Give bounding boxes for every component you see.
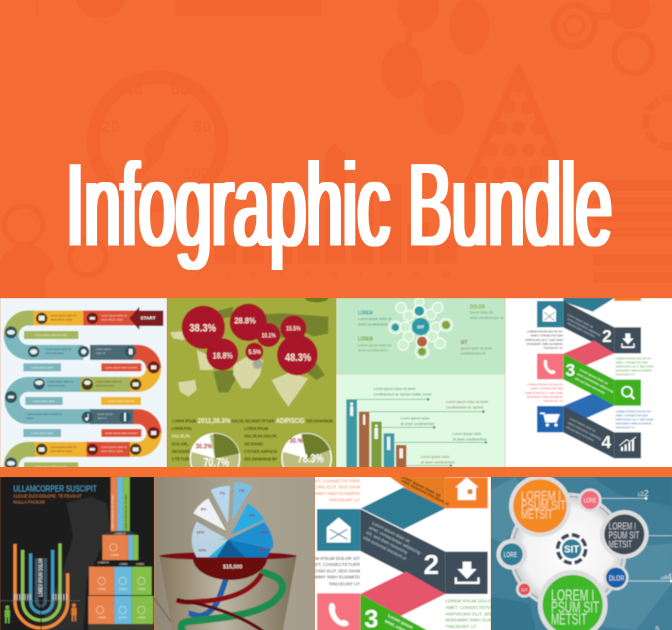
stacked tower: LOREM IP [98, 562, 109, 564]
panel: dark stacked chart [0, 477, 154, 630]
world map [170, 307, 328, 407]
captions: AMET, CONSECTETUER [308, 478, 361, 483]
small number labels: 444 [661, 571, 672, 581]
captions [315, 478, 360, 586]
timeline labels: turpis [27, 416, 34, 420]
pie chart: 10% [196, 529, 205, 534]
panel: ribbon steps: ADIPISCING ELIT, SED DIAM [615, 417, 654, 421]
pie: 30 / 78.3: 30.% [289, 436, 303, 445]
step captions [525, 329, 564, 403]
banner background pattern: 100 [183, 165, 210, 183]
network diagram [389, 297, 452, 358]
circle: orange: PSUM SIT [521, 497, 566, 512]
panel: ribbon steps close-up: AMET, CONSECTETUER [445, 605, 498, 610]
panel: ribbon steps: LOREM IPSUM DOLOR SIT [615, 409, 651, 413]
caption row: 2011.38.3% DOLOR, [244, 434, 277, 439]
captions: ADIPISCING ELIT, SED DIAM [300, 569, 360, 574]
circle: dark: PSUM SIT [609, 531, 639, 542]
circle: red sit: SIT [521, 587, 528, 592]
bar labels: Lorem ipsum dolor sit amet [373, 387, 415, 391]
pie: 30.3 / 70.7: 30.3% [195, 441, 212, 450]
stacked tower: LOREM IPSUM DOLOR SIT AMET [125, 494, 128, 531]
network labels: Ipsum dolor sit [470, 311, 493, 315]
panel: ribbon steps close-up: NONUMMY NIBH EUISMOD [445, 617, 504, 622]
bar labels: sit amet condimentum [453, 437, 487, 441]
center SIT badge [558, 535, 586, 563]
pie chart: 10% [260, 529, 269, 534]
concentric U chart [0, 543, 80, 630]
bar labels: condimentum at, laoreet [446, 405, 483, 409]
panel: ribbon steps: TINCIDUNT UT [615, 372, 635, 376]
red percentage bubbles: 18.8% [213, 350, 233, 360]
pie chart: 7% [219, 491, 225, 496]
banner background pattern: 4 [278, 270, 283, 279]
pie chart [192, 482, 273, 580]
caption row: LOREM IPSUM [172, 418, 196, 423]
U chart label: LOREM IPSUM DOLOR [38, 558, 44, 597]
stacked tower [88, 477, 153, 630]
ribbon text: Lorem ipsum dolor sit [372, 520, 411, 544]
banner background pattern: 8 [387, 270, 392, 279]
caption row: LOREM IPSU [172, 426, 192, 431]
step captions: AMET, CONSECTETUER [530, 334, 563, 338]
stacked tower: LOREM [98, 589, 106, 591]
start arrow: START [140, 316, 156, 321]
banner background pattern: 0 [106, 165, 115, 183]
circle: teal lore: LORE [504, 552, 517, 559]
banner background pattern: 80 [193, 118, 211, 136]
panel: ribbon steps: NONUMMY NIBH EUISMOD [615, 368, 652, 372]
caption row: CTETUER [172, 457, 193, 462]
banner background pattern: 3 [251, 270, 256, 279]
bar labels: Lorem ipsum dolor sit amet [446, 400, 488, 404]
stacked tower: LOREM [98, 618, 106, 620]
step captions: TINCIDUNT UT [543, 399, 563, 403]
stacked tower: LOREM [136, 564, 144, 566]
caption row: 2011,38.3% [198, 416, 231, 425]
caption row: SICENSE [244, 441, 263, 446]
panel: ribbon steps: AMET, CONSECTETUER [615, 413, 648, 417]
network diagram: SIT [417, 324, 424, 329]
circle: dark [600, 510, 649, 559]
network labels: amet condimentum [358, 349, 388, 353]
captions: LOREM IPSUM DOLOR SIT [303, 556, 360, 561]
timeline labels: amet nisl ut, turpis [101, 449, 124, 453]
circle: green [538, 570, 608, 630]
small number labels [637, 488, 672, 630]
timeline labels: amet nisl turpis [48, 383, 66, 387]
ribbon text: nibh euismod tincidunt ut [401, 478, 450, 507]
ribbon text: Lorem ipsum dolor sit [399, 473, 442, 498]
bar labels [373, 387, 488, 464]
panel: network and bars [336, 297, 505, 469]
step captions: NONUMMY NIBH EUISMOD [527, 342, 563, 346]
bar labels: condimentum at, laoreet mattis, lorem [373, 392, 432, 396]
bar labels: sit amet condimentum [421, 460, 455, 464]
network labels: LOREM [358, 337, 373, 343]
panel: ribbon steps close-up: ADIPISCING ELIT, SED DIAM [445, 611, 506, 616]
timeline labels: Lorem ipsum dolor sit [46, 347, 71, 351]
timeline labels: amet nisl ut, turpis [51, 449, 73, 453]
stacked tower: LOREM [137, 618, 146, 620]
timeline labels: dolor sit [96, 351, 106, 355]
red percentage bubbles: 28.8% [234, 316, 256, 326]
network labels: DOLOR [470, 304, 485, 310]
captions: TINCIDUNT UT [329, 581, 360, 586]
panel: ribbon steps: TINCIDUNT UT [615, 425, 635, 429]
caption row: ADIPISCIG [276, 416, 305, 425]
ribbon text: elit sed diam nonummy [566, 425, 595, 443]
step captions: ADIPISCING ELIT, SED DIAM [525, 338, 564, 342]
banner background pattern: 45.5% [270, 339, 317, 366]
stacked tower: LOREM [119, 618, 127, 620]
network labels: Lorem ipsum dolor sit [358, 317, 391, 321]
panel: ribbon steps close-up: TINCIDUNT UT [445, 624, 477, 629]
panel: ribbon steps close-up [315, 477, 491, 630]
network labels: amet condimentum at [470, 316, 504, 320]
bar labels: sit amet condimentum [400, 422, 435, 426]
caption row: SED DIANONUM [306, 418, 333, 423]
start arrow [129, 307, 163, 330]
step captions: ADIPISCING ELIT, SED DIAM [525, 391, 564, 395]
pie chart: 7% [239, 488, 245, 493]
chart heading: ULLAMCORPER SUSCIPIT [13, 484, 97, 493]
timeline labels: amet nisl ut, turpis [51, 318, 73, 322]
banner background pattern: 6 [333, 270, 338, 279]
pie: 30 / 78.3: 78.3% [298, 451, 324, 465]
bar labels: Lorem ipsum dolor [453, 432, 482, 436]
red percentage bubbles [182, 304, 318, 375]
network labels: amet condimentum [358, 322, 388, 326]
captions: AMET, CONSECTETUER [308, 562, 361, 567]
small number labels: 222 [637, 488, 649, 498]
caption row: SED DIANONUM MY [244, 457, 277, 462]
pie chart: 8% [249, 512, 256, 517]
step captions: LOREM IPSUM DOLOR SIT [527, 329, 563, 333]
timeline labels: Lorem ipsum dolor sit [48, 379, 73, 383]
pie chart: 8% [201, 507, 207, 512]
ribbon text: Lorem ipsum dolor sit [569, 416, 596, 433]
panel: ribbon steps: NONUMMY NIBH EUISMOD [615, 421, 652, 425]
timeline labels: amet nisl turpis [46, 351, 64, 355]
ribbon text: elit, sed diam nonummy [366, 530, 409, 555]
circle: orange: METSIT [521, 507, 553, 522]
circle: red sit [516, 581, 533, 598]
red percentage bubbles: 15.5% [286, 325, 301, 332]
timeline labels: Lorem ipsum dolor sit amet ut [27, 412, 62, 416]
ribbon text: amet consectetur adipiscing [567, 317, 602, 337]
bar labels: Lorem ipsum dolor [400, 417, 430, 421]
ribbon text: elit sed diam nonummy [567, 321, 596, 339]
step numbers: 2 [424, 549, 439, 580]
timeline labels: Lorem ipsum dolor sit [51, 445, 76, 449]
red percentage bubbles: 38.3% [189, 323, 216, 335]
step captions: TINCIDUNT UT [543, 346, 563, 350]
timeline labels [23, 314, 141, 470]
timeline icons [5, 313, 160, 469]
ribbons [177, 572, 283, 630]
red percentage bubbles: 10.1% [262, 333, 276, 340]
circle: green: PSUM SIT [551, 600, 600, 617]
step captions: LOREM IPSUM DOLOR SIT [527, 382, 563, 386]
banner background pattern [0, 0, 672, 394]
panel: serpentine timeline [0, 298, 167, 484]
timeline labels: Lorem ipsum dolor sit amet [35, 333, 67, 337]
stacked tower: LOREM [137, 589, 146, 591]
timeline labels: dolor sit [97, 416, 107, 420]
circle: pink lore: LORE [584, 497, 596, 504]
circle: orange: LOREM I [521, 488, 561, 503]
step captions: NONUMMY NIBH EUISMOD [527, 395, 563, 399]
caption row [172, 416, 333, 462]
banner background pattern: 5.1% [536, 339, 574, 366]
ribbon text: Lorem ipsum dolor sit [579, 368, 609, 385]
timeline labels: Lorem ipsum dolor sit [96, 379, 122, 383]
pie: 30.3 / 70.7 [188, 432, 242, 467]
captions: NONUMMY NIBH EUISMOD [302, 491, 361, 496]
caption row: 2011.38.3% [172, 434, 190, 439]
timeline labels: Lorem ipsum [96, 347, 112, 351]
circle: blue dlor: DLOR [609, 575, 624, 582]
banner: orange header [0, 0, 672, 394]
panel: ribbon steps: ADIPISCING ELIT, SED DIAM [615, 364, 654, 368]
step captions: AMET, CONSECTETUER [530, 387, 563, 391]
step numbers: 3 [566, 360, 576, 380]
caption row: DOLOR, SICONSECTETUER [232, 418, 275, 423]
timeline labels: amet nisl turpis [96, 383, 115, 387]
pie: 30.3 / 70.7: 70.7% [203, 455, 230, 469]
caption row: DOLOR, [172, 441, 189, 446]
pie chart: $15,000 [223, 564, 242, 570]
red percentage bubbles: 5.5% [248, 350, 262, 356]
step numbers [566, 326, 612, 452]
ribbon text: amet consectetur adipiscing [576, 372, 614, 394]
caption row: CTETUER ADIPISCIG [244, 449, 278, 454]
ribbon text [566, 312, 614, 443]
icon squares [317, 477, 488, 630]
circle: teal lore [496, 539, 527, 570]
circle: blue dlor [603, 565, 629, 590]
figures [5, 603, 77, 623]
timeline labels: Lorem ipsum dolor sit [101, 314, 127, 318]
red percentage bubbles: 48.3% [285, 352, 311, 364]
pie chart: 10% [198, 547, 207, 552]
banner background pattern: 9 [413, 270, 418, 279]
chart heading: AUGUE DUIS DOLORE. TE FEUGAIT [13, 493, 82, 498]
network labels: Ipsum dolor sit amet [461, 346, 492, 350]
timeline labels: Lorem ipsum dolor [31, 431, 53, 435]
timeline labels: Lorem ipsum dolor sit [108, 399, 134, 403]
ribbon text: Lorem ipsum dolor sit [567, 312, 594, 329]
timeline labels: Lorem ipsum dolor sit amet [35, 464, 67, 468]
funnel [154, 552, 297, 630]
panel: ribbon steps [505, 298, 672, 469]
central white ring [510, 494, 672, 609]
timeline labels: Lorem ipsum dolor sit amet [105, 431, 138, 435]
network labels: condimentum at [461, 352, 485, 356]
bar chart [346, 398, 488, 469]
ribbon text: Lorem ipsum [387, 613, 414, 630]
stacked tower: LOREM [119, 564, 128, 566]
banner background pattern: 60 [171, 81, 189, 99]
captions: NONUMMY NIBH EUISMOD [302, 575, 361, 580]
panel: ribbon steps: LOREM IPSUM DOLOR SIT [615, 356, 651, 360]
captions: ADIPISCING ELIT, SED DIAM [300, 484, 360, 489]
timeline labels: Lorem ipsum dolor [31, 365, 53, 369]
center SIT badge: SIT [564, 545, 579, 556]
banner background pattern: 7 [359, 270, 364, 279]
pie: 30 / 78.3 [280, 432, 333, 467]
banner background pattern: 20.% [406, 339, 444, 366]
stacked tower: LOREM [119, 589, 127, 591]
panel: circle diagram on teal [490, 475, 672, 630]
U chart label [14, 558, 67, 600]
banner background pattern: 40 [125, 81, 143, 99]
ribbon text: elit sed diam nonummy [574, 376, 606, 395]
circle: dark: METSIT [609, 539, 632, 550]
banner background pattern: 10 [441, 270, 451, 279]
banner background pattern: 5 [305, 270, 310, 279]
timeline labels: Lorem ipsum dolor sit amet [105, 365, 138, 369]
circle: dark: LOREM I [609, 521, 636, 532]
captions: TINCIDUNT UT [329, 498, 360, 503]
ribbons [360, 477, 445, 630]
circle: pink lore [578, 488, 602, 512]
banner background pattern: 1 [197, 270, 202, 279]
banner background pattern: 2 [225, 270, 230, 279]
ribbon text [362, 473, 450, 630]
banner background pattern: 20 [102, 118, 120, 136]
caption row: LOREM IPSUM [244, 426, 268, 431]
timeline labels: Lorem ipsum dolor sit [101, 445, 127, 449]
network labels: Lorem ipsum dolor sit [358, 343, 391, 347]
pie chart: 10% [258, 547, 266, 552]
panel: funnel pie chart [154, 477, 315, 630]
panel: ribbon steps close-up: LOREM IPSUM DOLOR SIT [445, 599, 502, 604]
circle: green: LOREM I [551, 588, 594, 605]
stacked tower: LOREM [111, 555, 119, 557]
ribbon text: amet, consectetuer adipiscing [368, 525, 422, 555]
network labels: LOREM [358, 310, 373, 316]
circle: orange [509, 475, 571, 537]
timeline labels: Lorem ipsum dolor sit [51, 314, 76, 318]
network labels [358, 304, 504, 356]
step numbers: 4 [602, 432, 612, 452]
timeline labels: Lorem ipsum [97, 412, 113, 416]
caption row: SICENSE [172, 449, 191, 454]
stacked tower: LOREM IP [114, 533, 126, 535]
circle: green: METSIT [551, 612, 587, 629]
stacked tower: LOREM IPSUM DOLOR SIT AMET [111, 494, 114, 531]
ribbon text: amet consectetur adipiscing [567, 421, 602, 441]
timeline labels: Lorem ipsum dolor [33, 399, 55, 403]
ribbon text: nibh euismod tincidunt ut [362, 535, 408, 561]
bar labels: Lorem ipsum dolor [421, 455, 450, 459]
panel: world map statistics [167, 298, 336, 467]
chart heading [13, 484, 97, 504]
step numbers: 2 [602, 326, 612, 346]
network labels: SIT [461, 340, 468, 346]
step icon squares [537, 301, 641, 458]
ribbons [563, 298, 614, 458]
panel: ribbon steps: AMET, CONSECTETUER [615, 360, 648, 364]
chart heading: NULLA FACILISI [13, 499, 45, 504]
step numbers [364, 549, 439, 630]
timeline labels: amet nisl ut, turpis [101, 318, 124, 322]
